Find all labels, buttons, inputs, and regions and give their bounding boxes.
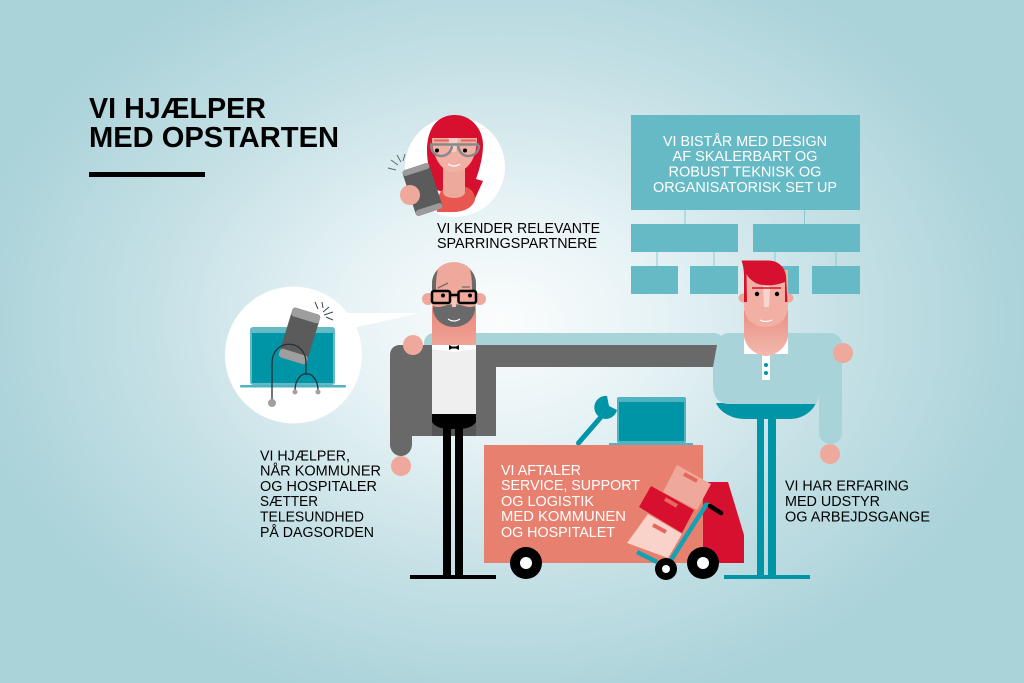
text: telesundhed: NÅR KOMMUNER [260,462,381,480]
hand [400,185,420,205]
org chart text: ORGANISATORISK SET UP [653,180,837,196]
buttons [764,363,768,367]
foot bar [410,575,496,579]
foot bar [724,575,810,579]
white circle [405,117,505,217]
legs [443,425,463,578]
eyes [435,148,439,152]
figure: man with beard [390,262,728,579]
hand truck with boxes [627,465,721,580]
middle box [639,486,694,533]
glasses [430,144,479,156]
title: VI HJÆLPER [89,93,266,125]
title [89,93,339,154]
phone signal [388,154,405,170]
belt [432,414,476,429]
shirt [432,345,476,414]
icon: wrench [578,396,617,443]
collar [432,345,476,352]
glasses [432,291,476,303]
phone [402,162,443,217]
truck [484,445,744,579]
truck text: VI AFTALER [501,463,581,479]
head [432,262,476,308]
bottom box [627,514,682,558]
nose [451,298,457,307]
ears [422,293,434,305]
brows [752,287,781,289]
shirt and arm [713,333,842,444]
text: telesundhed: SÆTTER [260,494,318,510]
text: erfaring: OG ARBEJDSGANGE [785,510,930,526]
nose [448,138,458,152]
trolley handle [710,506,721,513]
truck text: SERVICE, SUPPORT [501,478,640,494]
smile [448,164,460,166]
trolley frame [637,505,710,562]
side hair [432,270,476,290]
truck body [484,445,703,563]
laptop [250,327,335,385]
body [437,187,475,212]
bow tie [449,345,459,350]
hair [742,260,788,302]
eyes [441,294,445,298]
upper hand [833,343,853,363]
panel: organisation chart [631,115,860,294]
org chart connectors [657,210,836,266]
neck [443,165,465,198]
brows [434,140,476,142]
title underline [89,172,205,177]
neck [744,310,788,356]
text: sparringspartnere: VI KENDER RELEVANTE [437,221,600,237]
smile [448,319,460,321]
text: sparringspartnere [437,221,600,252]
org chart bottom boxes [631,266,860,294]
icon: woman with phone [388,115,505,217]
brows [438,283,470,288]
neck gradient [432,305,476,345]
legs [757,410,776,578]
icon: laptop with phone and stethoscope [225,286,420,424]
truck text: OG HOSPITALET [501,525,615,541]
truck text [501,463,640,541]
org chart top box [631,115,860,210]
text: telesundhed: OG HOSPITALER [260,479,377,495]
nose [763,285,770,307]
icon: laptop on truck [609,397,693,445]
org chart text [653,133,837,196]
text: erfaring [785,478,930,526]
trousers [716,403,816,419]
shoulder hand [403,335,423,355]
phone [278,307,321,365]
text: telesundhed [260,448,381,541]
text: sparringspartnere: SPARRINGSPARTNERE [437,236,597,252]
top box [663,465,711,510]
stethoscope [272,344,318,402]
org chart text: VI BISTÅR MED DESIGN [663,133,827,150]
text: telesundhed: TELESUNDHED [260,510,364,526]
lower hand [820,444,840,464]
org chart text: AF SKALERBART OG [672,149,818,165]
text: telesundhed: VI HJÆLPER, [260,448,350,464]
truck text: OG LOGISTIK [501,494,594,510]
jacket and arm [390,345,728,456]
placket [762,354,770,380]
text: erfaring: MED UDSTYR [785,494,880,510]
ears [738,294,748,302]
collar [744,335,788,354]
org chart middle boxes [631,224,860,252]
org chart text: ROBUST TEKNISK OG [668,164,822,180]
beard [433,304,475,327]
lower hand [391,456,411,476]
face [744,270,788,327]
truck wheels [510,547,542,579]
speech bubble [225,286,362,424]
text: telesundhed: PÅ DAGSORDEN [260,524,374,541]
smile [760,320,772,322]
figure: man with red hair [713,260,853,579]
text: erfaring: VI HAR ERFARING [785,478,909,494]
truck text: MED KOMMUNEN [501,509,626,525]
hair [427,115,483,203]
trouser top [432,414,476,436]
signal [315,302,333,320]
trolley wheel [655,558,677,580]
truck cab [703,482,744,563]
title: MED OPSTARTEN [89,122,339,154]
back arm of the second man [424,333,724,353]
face [432,138,477,172]
eyes [755,292,759,296]
